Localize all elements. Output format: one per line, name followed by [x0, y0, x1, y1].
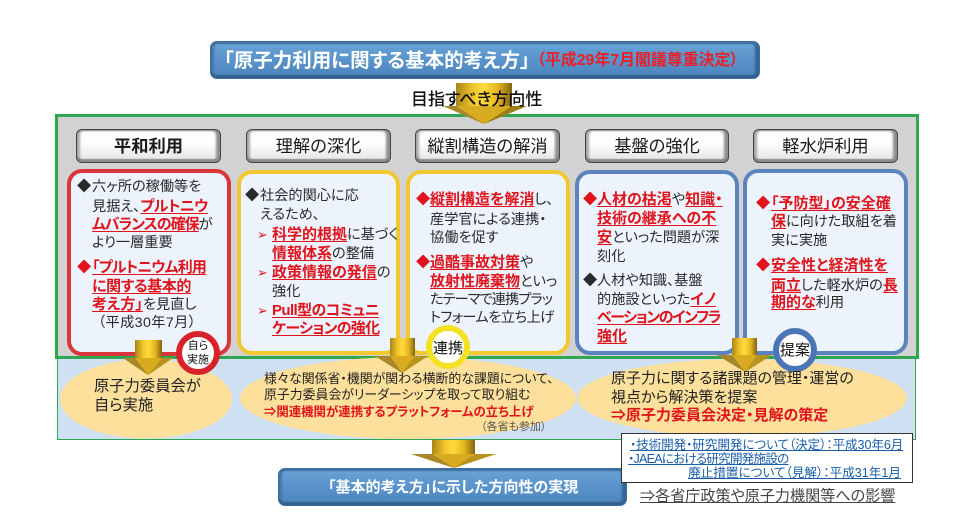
text: proposal: 視点から解決策を提案	[611, 388, 757, 406]
lower band: implementation	[57, 350, 916, 440]
text: 基盤の強化 body: ◆	[583, 273, 597, 289]
arrow: to result bar	[411, 440, 496, 468]
heading button: 基盤の強化	[585, 129, 729, 163]
text: 基盤の強化 body: 強化	[597, 328, 627, 345]
text: 理解の深化 body: ➢	[257, 303, 268, 318]
text: 理解の深化 body: 社会的関心に応	[260, 188, 359, 204]
text: 平和利用 body: 見据え、プルトニウ	[92, 198, 208, 215]
badge: 提案	[776, 331, 814, 369]
heading: target directions: 目指すべき方向性	[411, 90, 542, 109]
text: 理解の深化 body: ➢	[257, 265, 268, 280]
panel: 理解の深化	[237, 170, 400, 355]
text: 縦割構造の解消 body: 産学官による連携・	[430, 212, 546, 228]
text: 軽水炉利用 body: ◆	[756, 258, 770, 274]
text: 理解の深化 body: ◆	[245, 188, 259, 204]
text: cross-cutting issues: 様々な関係省・機関が関わる横断的な課題について、	[264, 371, 554, 386]
heading button: 軽水炉利用: 軽水炉利用	[782, 136, 869, 156]
heading button: 縦割構造の解消: 縦割構造の解消	[427, 136, 548, 156]
text: 平和利用 body: ◆	[77, 179, 91, 195]
text: 平和利用 body: 「プルトニウム利用	[92, 259, 206, 276]
ellipse: self-implementation	[60, 360, 232, 438]
text: 理解の深化 body: 強化	[272, 284, 300, 300]
text: cross-cutting issues: ⇒関連機関が連携するプラットフォームの立ち上げ	[264, 405, 534, 419]
text: 平和利用 body: より一層重要	[92, 235, 173, 251]
text: 基盤の強化 body: 刻化	[597, 249, 625, 265]
ellipse: cross-cutting issues	[240, 357, 576, 439]
text: 平和利用 body: ◆	[77, 260, 91, 276]
text: 基盤の強化 body: ◆	[583, 192, 597, 208]
text: 平和利用 body	[77, 178, 212, 331]
text: 平和利用 body: に関する基本的	[92, 278, 191, 295]
text: 軽水炉利用 body: 「予防型」の安全確	[771, 195, 891, 212]
callout: decisions and views	[621, 433, 913, 483]
text: self-implementation: 原子力委員会が	[94, 378, 201, 395]
heading button: 基盤の強化: 基盤の強化	[614, 136, 700, 156]
text: 縦割構造の解消 body: トフォームを立ち上げ	[430, 310, 554, 326]
text: 軽水炉利用 body: 両立した軽水炉の長	[771, 277, 898, 294]
text: 平和利用 body: ムバランスの確保が	[92, 216, 212, 233]
badge: 提案: 提案	[780, 342, 810, 359]
text: 基盤の強化 body: 安といった問題が深	[597, 229, 719, 246]
text: 理解の深化 body: ケーションの強化	[272, 320, 379, 337]
badge: 自ら実施: 自ら	[188, 339, 208, 352]
text: 平和利用 body: 六ヶ所の稼働等を	[92, 179, 201, 195]
text: proposal: ⇒原子力委員会決定・見解の策定	[611, 407, 828, 424]
heading button: 軽水炉利用	[753, 129, 898, 163]
panel: target directions frame	[55, 114, 919, 359]
arrow: 基盤の強化 down	[717, 338, 772, 372]
text: self-implementation: 自ら実施	[94, 397, 153, 414]
panel: 軽水炉利用	[743, 169, 908, 355]
text: 理解の深化 body: えるため、	[260, 207, 320, 223]
text: 理解の深化 body: ➢	[257, 227, 268, 242]
text: 理解の深化 body: Pull型のコミュニ	[272, 302, 379, 319]
heading button: 理解の深化	[246, 129, 391, 163]
heading button: 理解の深化: 理解の深化	[276, 136, 361, 156]
text: 理解の深化 body	[245, 188, 398, 337]
text: 理解の深化 body: 科学的根拠に基づく	[272, 226, 398, 243]
text: 軽水炉利用 body	[756, 195, 898, 311]
text: cross-cutting issues: 原子力委員会がリーダーシップを取って取り組む	[264, 387, 530, 402]
text: 縦割構造の解消 body: 協働を促す	[430, 230, 498, 246]
arrow: 平和利用 down	[123, 340, 173, 375]
text: 軽水炉利用 body: 安全性と経済性を	[771, 257, 888, 274]
badge: 自ら実施: 実施	[187, 353, 209, 366]
heading button: 縦割構造の解消	[415, 129, 560, 163]
text: 縦割構造の解消 body: 放射性廃棄物といっ	[430, 273, 557, 290]
text: 基盤の強化 body: 的施設といったイノ	[597, 291, 716, 308]
text: proposal: 原子力に関する諸課題の管理・運営の	[611, 370, 854, 387]
panel: 縦割構造の解消	[406, 170, 570, 355]
text: 縦割構造の解消 body: 縦割構造を解消し、	[430, 191, 553, 208]
text: 平和利用 body: （平成30年7月）	[98, 315, 196, 331]
text: 軽水炉利用 body: 期的な利用	[771, 294, 844, 311]
text: proposal	[611, 370, 854, 424]
badge: 連携: 連携	[433, 340, 463, 357]
arrow: 理解の深化 down	[375, 338, 428, 373]
text: 軽水炉利用 body: ◆	[756, 196, 770, 212]
text: 基盤の強化 body: 人材や知識、基盤	[597, 273, 703, 289]
callout: decisions and views: 廃止措置について（見解）：平成31年1月	[688, 466, 901, 480]
text: 基盤の強化 body: 人材の枯渇や知識・	[597, 191, 723, 208]
callout: decisions and views: ・JAEAにおける研究開発施設の	[628, 452, 788, 466]
title bar	[210, 41, 760, 79]
text: 基盤の強化 body: 技術の継承への不	[597, 210, 716, 227]
result bar text: 「基本的考え方」に示した方向性の実現	[328, 479, 578, 496]
text: influence on ministries: ⇒各省庁政策や原子力機関等への影響	[640, 488, 895, 505]
badge: 連携	[429, 328, 467, 366]
title text: 「原子力利用に関する基本的考え方」	[224, 50, 530, 72]
panel: 平和利用	[67, 169, 231, 356]
ellipse: proposal	[577, 359, 907, 437]
panel: 基盤の強化	[575, 170, 739, 355]
text: cross-cutting issues	[264, 371, 554, 419]
arrow: title to directions	[443, 83, 527, 124]
text: 理解の深化 body: 情報体系の整備	[272, 245, 374, 262]
text: ministries note: （各省も参加）	[481, 421, 546, 433]
text: 縦割構造の解消 body: ◆	[416, 192, 430, 208]
text: 軽水炉利用 body: 保に向けた取組を着	[771, 213, 897, 230]
text: 基盤の強化 body	[583, 191, 723, 345]
text: 縦割構造の解消 body: 過酷事故対策や	[430, 254, 533, 271]
text: 理解の深化 body: 政策情報の発信の	[272, 264, 390, 281]
title date note: （平成29年7月閣議尊重決定）	[537, 52, 738, 69]
callout: decisions and views: ・技術開発・研究開発について（決定）：平成30年6月	[630, 438, 903, 452]
badge: 自ら実施	[179, 334, 217, 372]
heading button: 平和利用: 平和利用	[114, 136, 183, 156]
text: self-implementation	[94, 378, 201, 414]
text: 縦割構造の解消 body: たテーマで連携プラッ	[430, 292, 552, 308]
text: 縦割構造の解消 body: ◆	[416, 255, 430, 271]
text: 基盤の強化 body: ベーションのインフラ	[597, 309, 720, 326]
heading button: 平和利用	[76, 129, 221, 163]
text: 軽水炉利用 body: 実に実施	[771, 233, 827, 249]
text: 縦割構造の解消 body	[416, 191, 557, 326]
text: 平和利用 body: 考え方」を見直し	[92, 296, 196, 313]
result bar	[278, 468, 627, 506]
